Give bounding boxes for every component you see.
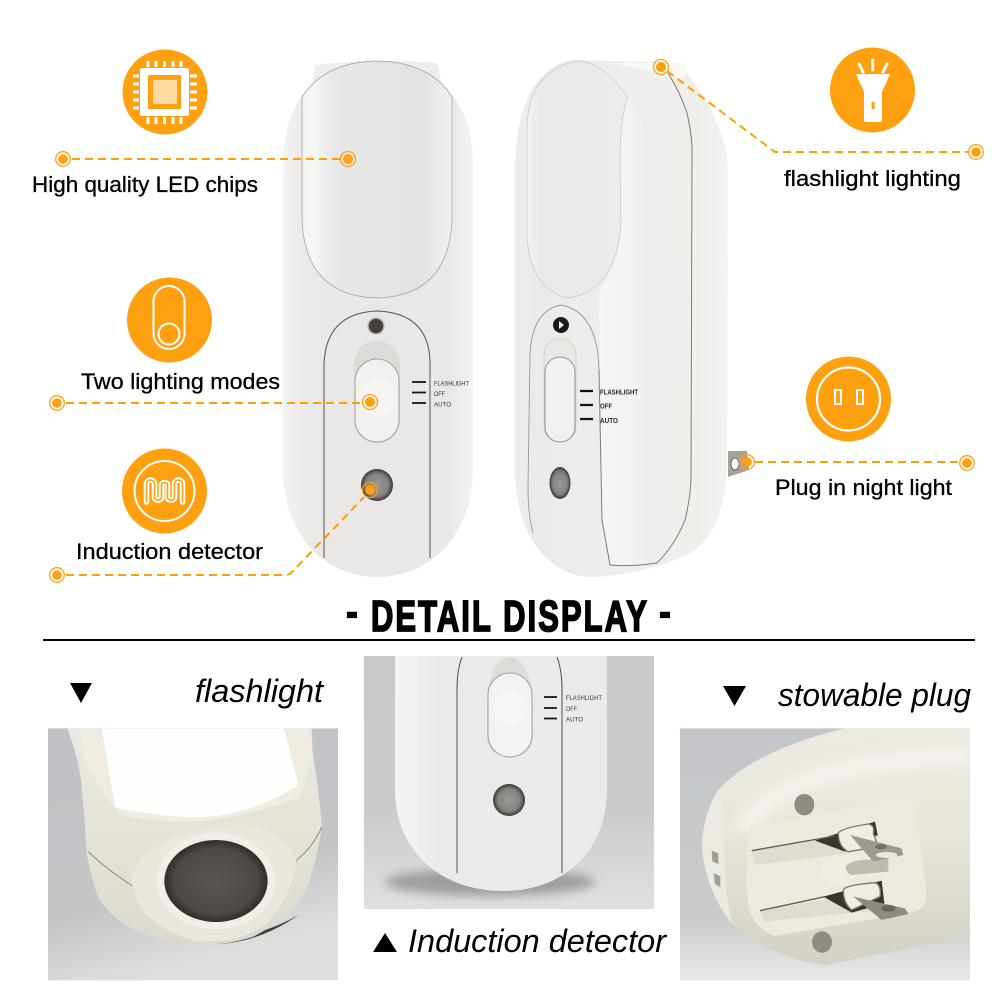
dark indicator <box>553 317 569 333</box>
motion sensor <box>493 784 525 816</box>
top tab <box>312 61 442 85</box>
mode marks: AUTO <box>600 416 618 425</box>
device body <box>283 85 473 577</box>
panel: stowable plug photo <box>680 728 970 980</box>
callout: LED chips <box>32 50 356 197</box>
callout: lighting modes <box>50 278 377 410</box>
anchor dot left <box>56 152 70 166</box>
screw holes <box>794 794 832 953</box>
leader line <box>667 71 968 152</box>
body seam <box>599 73 692 566</box>
switch panel <box>528 305 599 533</box>
callout: flashlight lighting <box>654 48 983 191</box>
anchor dot left <box>50 568 64 582</box>
mode marks: FLASHLIGHT <box>600 388 638 396</box>
label: stowable plug <box>778 677 971 713</box>
anchor dot left <box>740 455 754 469</box>
top surface <box>608 63 687 79</box>
label: flashlight lighting <box>784 166 961 191</box>
icon: LED chip <box>122 50 208 134</box>
floor shadow <box>183 915 298 944</box>
marker triangle <box>70 683 92 703</box>
lens bevel <box>78 728 313 822</box>
section heading: - <box>659 587 671 636</box>
lower prong <box>843 883 908 920</box>
anchor dot right <box>960 456 974 470</box>
dark indicator <box>368 318 384 334</box>
upper ridge <box>742 757 970 830</box>
shell <box>67 728 322 945</box>
plug prong <box>728 451 749 477</box>
anchor dot right <box>362 394 378 410</box>
motion sensor <box>361 469 393 501</box>
icon: plug <box>806 356 891 442</box>
mode marks: FLASHLIGHT <box>566 695 602 702</box>
switch panel <box>457 657 562 873</box>
marker triangle <box>373 933 397 952</box>
heading: induction detector <box>373 923 667 959</box>
leader line <box>66 497 364 575</box>
anchor dot right <box>969 145 983 159</box>
lens ring <box>132 826 297 942</box>
panel: flashlight photo <box>48 728 338 980</box>
slide switch <box>544 338 576 442</box>
anchor dot left <box>50 396 64 410</box>
callout: plug in night light <box>740 356 974 500</box>
mode marks: FLASHLIGHT <box>434 380 469 388</box>
device <box>395 656 607 891</box>
section heading <box>346 587 671 641</box>
lens <box>302 61 452 298</box>
heading: flashlight <box>70 673 324 709</box>
lens <box>527 61 628 298</box>
leader line <box>72 158 340 160</box>
label: Induction detector <box>408 923 667 959</box>
label: Plug in night light <box>775 475 952 500</box>
floor shadow <box>385 868 595 896</box>
product photo: angled view <box>515 60 749 577</box>
anchor dot left <box>654 60 668 74</box>
panel: induction detector photo <box>364 656 654 909</box>
motion sensor <box>550 467 570 499</box>
heading: stowable plug <box>723 677 971 713</box>
switch panel <box>324 311 430 558</box>
flashlight lens <box>164 840 268 922</box>
side bevel <box>599 98 650 565</box>
seam <box>88 827 322 891</box>
upper prong <box>838 824 903 862</box>
mode marks <box>580 388 638 425</box>
icon: toggle <box>127 278 212 362</box>
pivot <box>822 855 888 884</box>
leader line <box>755 461 959 463</box>
device body <box>515 60 728 577</box>
label: Two lighting modes <box>81 369 280 394</box>
lower slot <box>760 881 886 922</box>
device shell <box>702 728 970 965</box>
anchor dot right <box>362 482 378 498</box>
slide switch <box>354 341 400 443</box>
mode marks: AUTO <box>434 402 451 408</box>
plug plate <box>746 799 927 936</box>
pivot slot <box>846 858 888 875</box>
product photo: front view <box>283 61 473 577</box>
upper slot <box>752 822 879 865</box>
label: flashlight <box>195 673 324 709</box>
mode marks <box>412 380 469 408</box>
vents <box>712 851 720 887</box>
icon: induction coil <box>122 448 207 534</box>
mode marks <box>544 695 602 724</box>
anchor dot right <box>340 152 356 166</box>
mode marks: AUTO <box>566 716 583 724</box>
icon: flashlight <box>830 48 915 132</box>
indicator highlight <box>559 321 564 329</box>
section heading: - <box>346 587 358 636</box>
section heading: DETAIL DISPLAY <box>371 592 649 641</box>
leader line <box>66 402 362 404</box>
end cap <box>702 790 732 923</box>
label: High quality LED chips <box>32 172 258 197</box>
ring inner <box>157 833 275 929</box>
mode marks: OFF <box>434 391 445 398</box>
mode marks: OFF <box>600 402 612 410</box>
slide switch <box>487 657 533 757</box>
callout: induction detector <box>50 448 377 582</box>
label: Induction detector <box>76 539 263 564</box>
marker triangle <box>723 686 746 706</box>
mode marks: OFF <box>566 706 577 713</box>
lens window <box>102 728 298 817</box>
